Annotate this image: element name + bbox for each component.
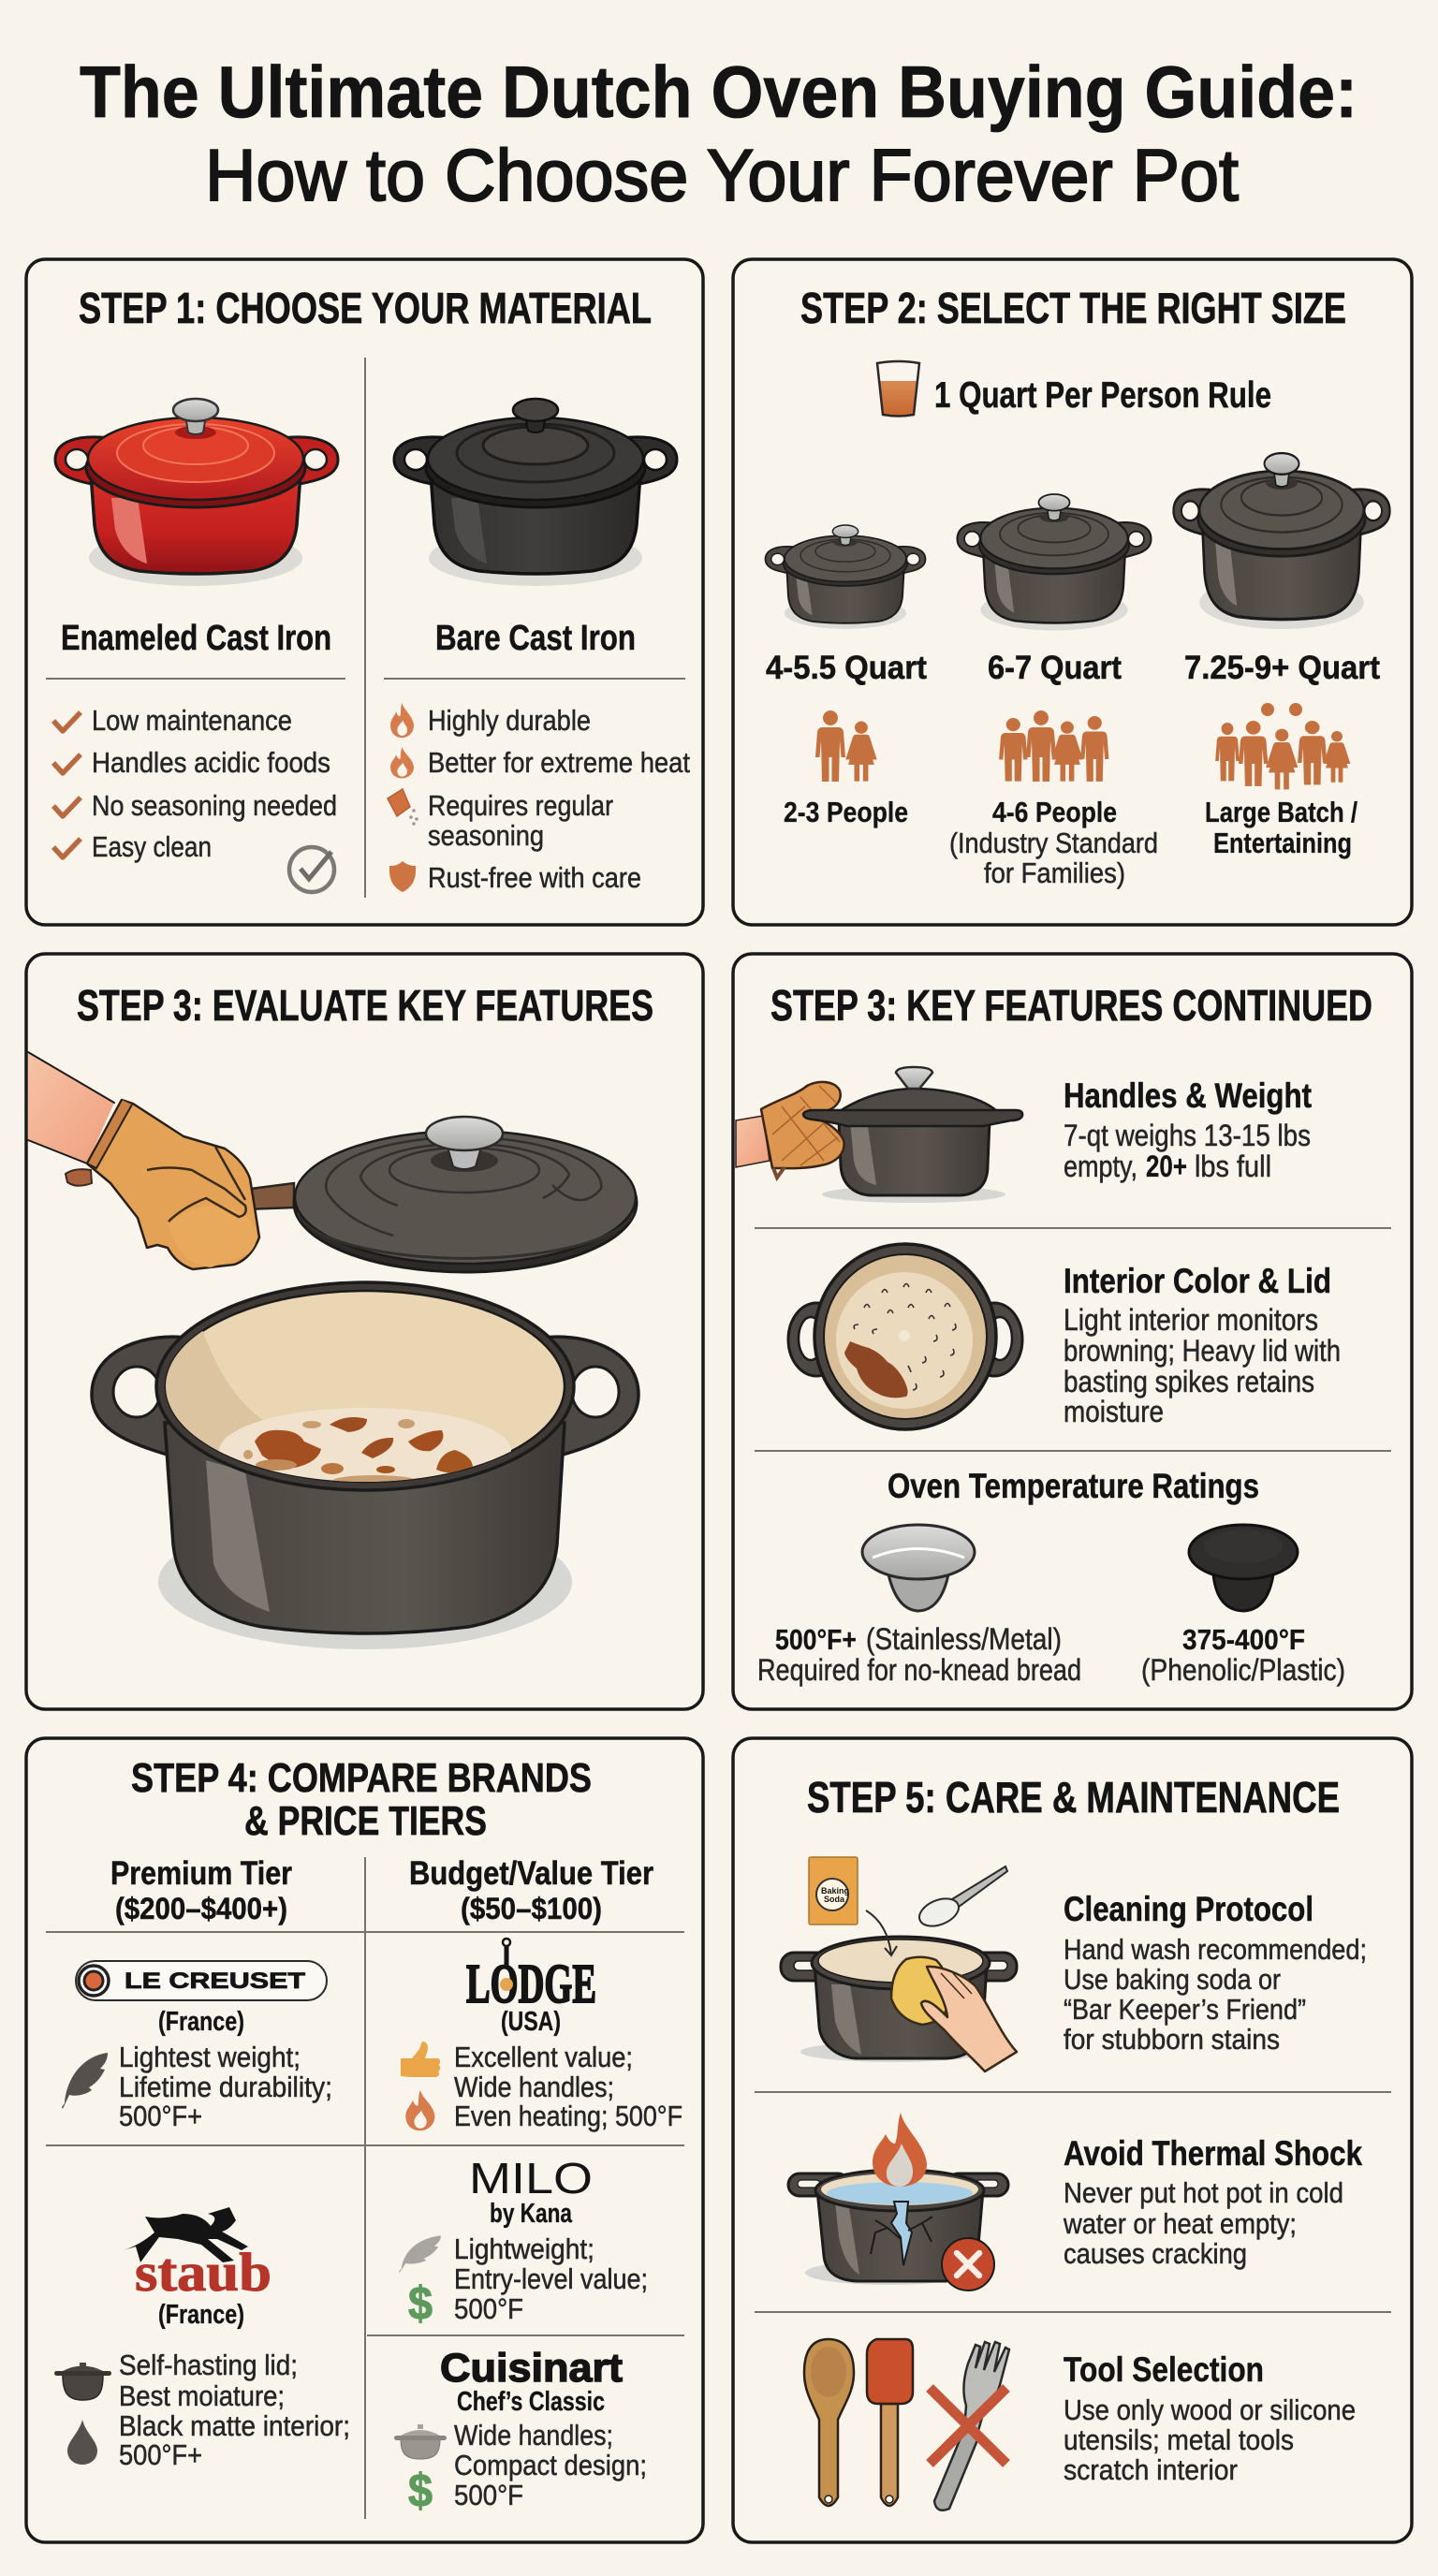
label: enameled cast iron: Enameled Cast Iron (61, 619, 331, 658)
size label: 6-7 quart: 6-7 Quart (988, 650, 1122, 686)
icons: check marks (53, 712, 81, 857)
heading: step 3: STEP 3: EVALUATE KEY FEATURES (77, 981, 653, 1030)
logo: milo: MILO (469, 2154, 593, 2203)
label: usa: (USA) (501, 2007, 561, 2037)
label: chef's classic: Chef’s Classic (457, 2387, 605, 2417)
icon: 2 people (815, 710, 877, 782)
heading: step 1: STEP 1: CHOOSE YOUR MATERIAL (79, 284, 652, 332)
illustration: lifted lid (294, 1117, 637, 1272)
cleaning protocol text: Cleaning Protocol (1064, 1890, 1313, 1928)
title: How to Choose Your Forever Pot (205, 134, 1239, 216)
icon: thumbs up (401, 2042, 440, 2077)
title: The Ultimate Dutch Oven Buying Guide: (80, 51, 1357, 133)
thermal shock text (1063, 2134, 1362, 2270)
illustration: medium pot (957, 494, 1152, 631)
bare cast iron list: Highly durable (428, 704, 591, 737)
staub details: Black matte interior; (119, 2409, 350, 2442)
cleaning protocol text: for stubborn stains (1064, 2023, 1280, 2056)
bare cast iron list: seasoning (428, 819, 544, 852)
phenolic rating text (1141, 1623, 1345, 1687)
lodge details: Wide handles; (454, 2071, 614, 2103)
cleaning protocol text (1064, 1890, 1367, 2056)
logo: staub: staub (135, 2242, 271, 2303)
logo: cuisinart: Cuisinart (440, 2346, 623, 2391)
people label: 2-3 people: 2-3 People (784, 796, 908, 828)
budget tier header (409, 1855, 653, 1925)
title (80, 51, 1357, 216)
bare cast iron list: Rust-free with care (428, 861, 641, 894)
panel: step 3 key features continued (733, 954, 1412, 1709)
people label: 4-6 people: for Families) (984, 856, 1125, 889)
interior color and lid text: Interior Color & Lid (1064, 1262, 1331, 1300)
lodge details: Excellent value; (454, 2041, 633, 2073)
label: france: (France) (158, 2300, 244, 2330)
icon: seasoning pour (388, 789, 418, 826)
milo details: Lightweight; (454, 2232, 594, 2265)
lodge details (454, 2041, 682, 2132)
logo: le creuset (76, 1961, 327, 2000)
bare cast iron list: Requires regular (428, 789, 613, 822)
premium tier header: ($200–$400+) (115, 1892, 287, 1925)
illustration: oven mitt holding pot (736, 1067, 1022, 1203)
lodge details: Even heating; 500°F (454, 2100, 682, 2132)
size label: 7.25-9+ quart: 7.25-9+ Quart (1184, 650, 1380, 686)
people label: 4-6 people: 4-6 People (992, 796, 1117, 828)
label: bare cast iron: Bare Cast Iron (435, 619, 636, 658)
stainless rating text: 500°F+ (775, 1623, 857, 1656)
panel: step 5 care and maintenance (733, 1738, 1412, 2542)
handles and weight text: 20+ (1146, 1149, 1187, 1183)
le creuset details (119, 2041, 332, 2132)
bare cast iron list (428, 704, 690, 894)
handles and weight text: 7-qt weighs 13-15 lbs (1064, 1119, 1311, 1152)
illustration: small pot (766, 525, 925, 629)
icon: stainless knob (862, 1525, 975, 1611)
interior color and lid text: browning; Heavy lid with (1064, 1334, 1341, 1368)
icon: flame heat (390, 747, 414, 778)
handles and weight text: lbs full (1195, 1149, 1271, 1183)
premium tier header: Premium Tier (110, 1855, 292, 1892)
icon: circled check (289, 847, 334, 892)
cuisinart details: Compact design; (454, 2449, 647, 2481)
logo: le creuset: LE CREUSET (125, 1969, 305, 1994)
tool selection text: Tool Selection (1064, 2350, 1264, 2389)
stainless rating text (757, 1622, 1081, 1687)
panel: step 4 compare brands (26, 1738, 703, 2542)
icon: flame durable (390, 703, 414, 738)
icon: gray feather (399, 2235, 441, 2273)
staub details: Best moiature; (119, 2379, 285, 2412)
heading: step 4: & PRICE TIERS (244, 1798, 487, 1844)
tool selection text (1064, 2350, 1356, 2486)
interior color and lid text: moisture (1064, 1395, 1164, 1428)
cuisinart details: Wide handles; (454, 2419, 613, 2452)
icon: flame (405, 2090, 434, 2130)
people label: large batch: Entertaining (1213, 827, 1352, 859)
illustration: large pot (1174, 453, 1389, 629)
interior color and lid text: Light interior monitors (1064, 1303, 1318, 1337)
illustration: red enameled pot (55, 399, 338, 586)
icon: water drop (67, 2420, 97, 2465)
thermal shock text: Avoid Thermal Shock (1064, 2134, 1362, 2173)
size label: 4-5.5 quart: 4-5.5 Quart (766, 650, 927, 686)
phenolic rating text: (Phenolic/Plastic) (1141, 1653, 1345, 1687)
illustration: black bare cast iron pot (394, 399, 677, 586)
icon: gray pot (394, 2424, 447, 2459)
icon: measuring glass (877, 361, 919, 416)
illustration: crossed out metal fork (930, 2342, 1009, 2510)
handles and weight text (1064, 1076, 1312, 1183)
label: by kana: by Kana (490, 2199, 573, 2229)
heading: step 4 (131, 1755, 592, 1844)
le creuset details: Lightest weight; (119, 2041, 301, 2073)
enameled benefits list: Easy clean (92, 830, 212, 863)
milo details: Entry-level value; (454, 2262, 648, 2295)
bare cast iron list: Better for extreme heat (428, 746, 690, 779)
enameled benefits list: No seasoning needed (92, 789, 337, 822)
handles and weight text: empty, (1064, 1149, 1137, 1183)
people label: 4-6 people (949, 796, 1158, 889)
panel: step 1 choose your material (26, 259, 703, 925)
thermal shock text: causes cracking (1064, 2237, 1247, 2270)
heading: step 4: STEP 4: COMPARE BRANDS (131, 1755, 592, 1801)
logo: staub (124, 2207, 271, 2303)
stainless rating text: Required for no-knead bread (757, 1653, 1081, 1687)
logo: lodge: LODGE (466, 1953, 596, 2014)
interior color and lid text: basting spikes retains (1064, 1365, 1314, 1398)
illustration: cleaning pot: Soda (824, 1895, 845, 1904)
illustration: hand lifting lid (28, 1052, 294, 1269)
icon: phenolic knob (1189, 1525, 1298, 1611)
enameled benefits list: Low maintenance (92, 704, 292, 737)
staub details: 500°F+ (119, 2438, 202, 2471)
illustration: thermal shock (788, 2113, 1008, 2291)
illustration: silicone spatula (867, 2339, 913, 2506)
icon: dollar: $ (408, 2465, 433, 2517)
illustration: cleaning pot (781, 1857, 1017, 2071)
heading: oven temperature ratings: Oven Temperature Ratings (888, 1467, 1259, 1505)
milo details (454, 2232, 648, 2325)
budget tier header: ($50–$100) (461, 1892, 602, 1925)
illustration: cleaning pot: Baking (821, 1886, 849, 1895)
cuisinart details: 500°F (454, 2479, 523, 2511)
icon: dollar: $ (408, 2277, 433, 2330)
le creuset details: Lifetime durability; (119, 2071, 332, 2103)
cleaning protocol text: “Bar Keeper’s Friend” (1064, 1993, 1306, 2026)
rule text: 1 Quart Per Person Rule (934, 375, 1271, 416)
thermal shock text: water or heat empty; (1063, 2207, 1297, 2240)
icon: small pot (54, 2363, 111, 2400)
handles and weight text: Handles & Weight (1064, 1076, 1312, 1115)
tool selection text: utensils; metal tools (1064, 2423, 1294, 2456)
enameled benefits list: Handles acidic foods (92, 746, 330, 779)
illustration: pot interior top view (788, 1244, 1022, 1429)
icon: 4 people (999, 710, 1108, 782)
people label: large batch: Large Batch / (1205, 796, 1357, 828)
enameled benefits list (92, 704, 337, 863)
panel: step 3 evaluate key features (26, 954, 703, 1709)
milo details: 500°F (454, 2292, 523, 2325)
staub details: Self-hasting lid; (119, 2349, 298, 2381)
people label: large batch (1205, 796, 1357, 859)
icon: feather (62, 2053, 108, 2109)
illustration: open pot with food (92, 1282, 638, 1649)
budget tier header: Budget/Value Tier (409, 1855, 653, 1892)
icon: shield (389, 861, 416, 892)
thermal shock text: Never put hot pot in cold (1064, 2176, 1343, 2209)
phenolic rating text: 375-400°F (1182, 1623, 1305, 1656)
cleaning protocol text: Use baking soda or (1064, 1963, 1281, 1996)
logo: lodge (466, 1939, 596, 2014)
label: france: (France) (158, 2007, 244, 2037)
tool selection text: Use only wood or silicone (1064, 2393, 1356, 2426)
illustration: wooden spoon (804, 2339, 854, 2506)
staub details (119, 2349, 350, 2471)
le creuset details: 500°F+ (119, 2100, 202, 2132)
people label: 4-6 people: (Industry Standard (949, 827, 1158, 859)
cuisinart details (454, 2419, 647, 2511)
icon: crowd of people (1215, 703, 1350, 789)
interior color and lid text (1064, 1262, 1341, 1428)
panel: step 2 select the right size (733, 259, 1412, 925)
stainless rating text: (Stainless/Metal) (866, 1622, 1062, 1656)
tool selection text: scratch interior (1064, 2453, 1238, 2486)
cleaning protocol text: Hand wash recommended; (1064, 1933, 1367, 1966)
premium tier header (110, 1855, 292, 1925)
